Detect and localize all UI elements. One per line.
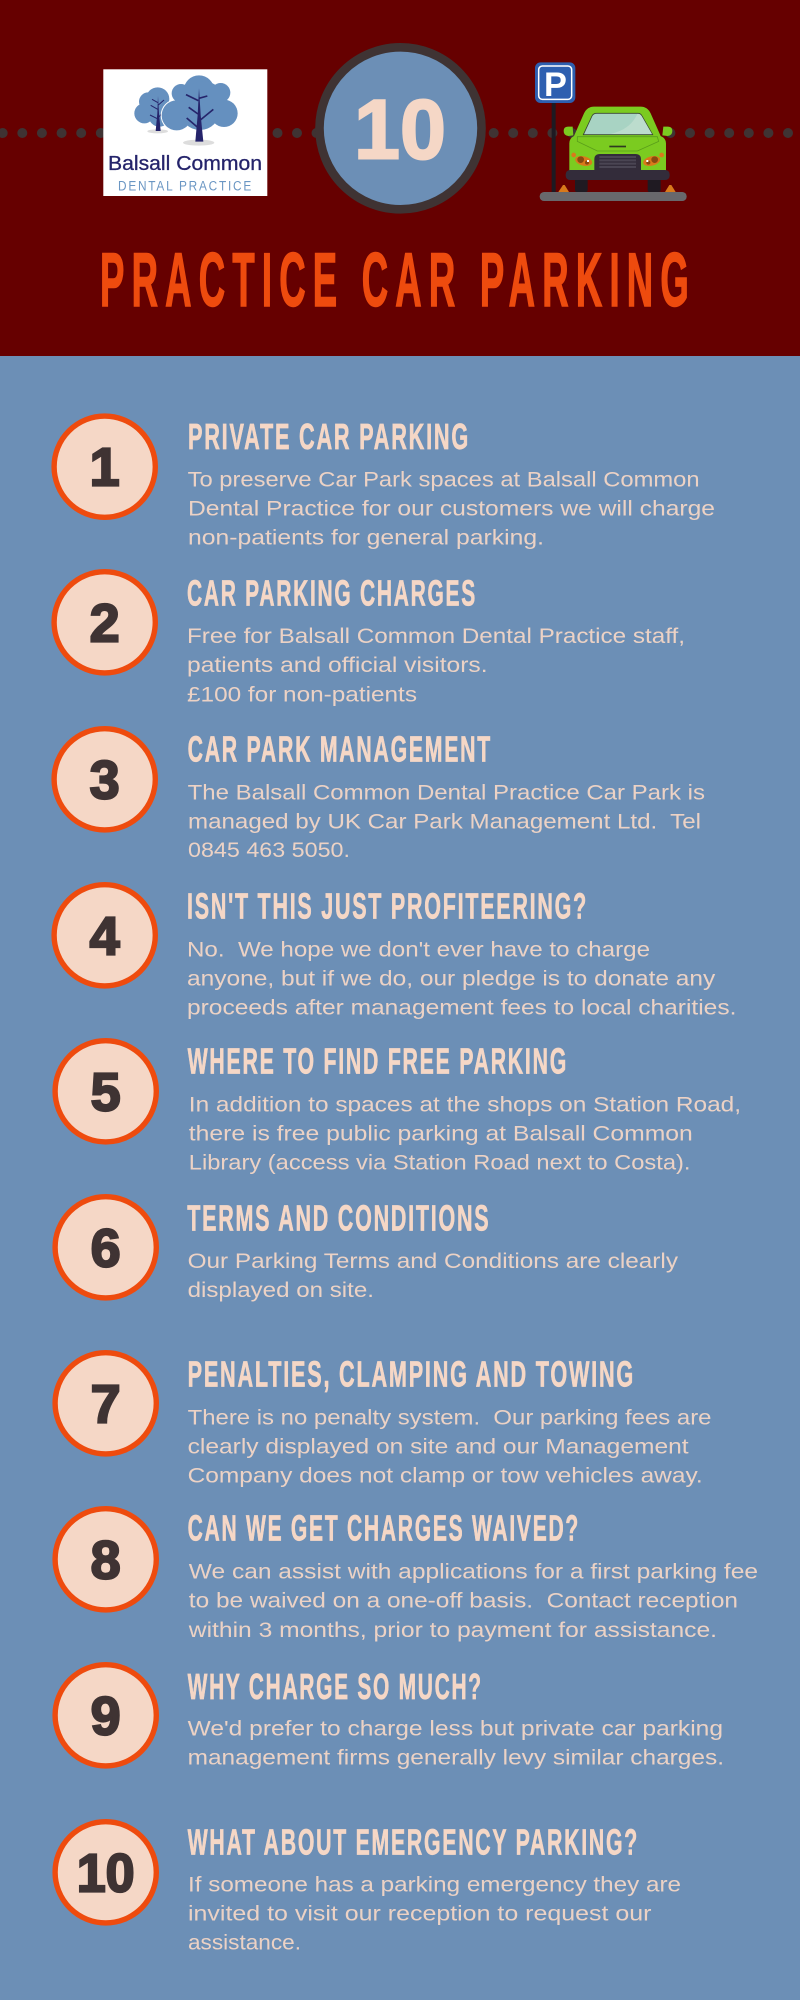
number 2: 2 (90, 594, 120, 654)
icon: parking sign: P (544, 66, 567, 104)
number 4: 4 (90, 906, 120, 966)
text 9: We'd prefer to charge less but private car parking (188, 1717, 723, 1740)
text 8: to be waived on a one-off basis. Contact reception (189, 1590, 738, 1613)
icon: car (564, 107, 672, 192)
item 8 (55, 1508, 758, 1642)
heading 3: CAR PARK MANAGEMENT (188, 729, 492, 770)
item 9 (55, 1665, 724, 1769)
number 7 (55, 1353, 156, 1454)
number 4 (54, 885, 155, 986)
text 10 (188, 1873, 681, 1954)
number 8 (55, 1509, 156, 1610)
text 4: anyone, but if we do, our pledge is to donate any (187, 967, 716, 990)
text 6: Our Parking Terms and Conditions are clearly (188, 1250, 679, 1273)
number 9: 9 (91, 1686, 121, 1746)
text 2: Free for Balsall Common Dental Practice staff, (187, 625, 685, 648)
text 10: If someone has a parking emergency they are (188, 1873, 681, 1896)
text 3: The Balsall Common Dental Practice Car Park is (188, 781, 705, 804)
number 5 (55, 1041, 156, 1142)
number 10 (55, 1822, 156, 1923)
text 8 (188, 1561, 758, 1642)
text 1: To preserve Car Park spaces at Balsall Common (188, 469, 700, 492)
text 7: Company does not clamp or tow vehicles away. (188, 1464, 703, 1487)
text 1 (188, 469, 715, 550)
text 3: 0845 463 5050. (188, 839, 350, 862)
heading 9: WHY CHARGE SO MUCH? (188, 1666, 483, 1707)
number 6 (55, 1197, 156, 1298)
item 2 (54, 572, 685, 707)
text 7: clearly displayed on site and our Management (188, 1435, 689, 1458)
icon: trees (134, 74, 238, 146)
text 7 (188, 1406, 712, 1487)
item 7 (55, 1353, 712, 1487)
number 2 (54, 572, 155, 673)
item 1 (54, 416, 715, 550)
number 5: 5 (91, 1062, 121, 1122)
item 10 (55, 1822, 681, 1954)
text 2: patients and official visitors. (187, 654, 488, 677)
badge: 10: 10 (354, 82, 446, 176)
text 1: non-patients for general parking. (188, 527, 544, 550)
number 1 (54, 416, 155, 517)
icon: ground and wheel stops (540, 185, 687, 201)
text 10: invited to visit our reception to request our (188, 1902, 651, 1925)
item 3 (54, 729, 705, 862)
number 9 (55, 1665, 156, 1766)
number 6: 6 (91, 1218, 121, 1278)
dotted line (0, 128, 793, 138)
text 5: In addition to spaces at the shops on Station Road, (189, 1093, 741, 1116)
text 5: Library (access via Station Road next to Costa). (189, 1151, 691, 1174)
number 3 (54, 729, 155, 830)
number 1: 1 (90, 438, 120, 498)
item 5 (55, 1041, 741, 1174)
text 3 (188, 781, 705, 862)
text 3: managed by UK Car Park Management Ltd. Tel (188, 810, 701, 833)
text 9 (188, 1717, 724, 1769)
text 6: displayed on site. (188, 1279, 374, 1302)
text 5 (189, 1093, 741, 1174)
number 3: 3 (90, 750, 120, 810)
heading 1: PRIVATE CAR PARKING (188, 416, 470, 457)
text 7: There is no penalty system. Our parking fees are (188, 1406, 712, 1429)
number 10: 10 (77, 1844, 135, 1904)
icon: car with parking sign (535, 62, 687, 201)
number 7: 7 (91, 1374, 121, 1434)
text 4 (187, 938, 736, 1019)
number 8: 8 (91, 1530, 121, 1590)
text 10: assistance. (188, 1931, 301, 1954)
text 9: management firms generally levy similar charges. (188, 1746, 724, 1769)
text 2 (187, 625, 685, 707)
text 4: proceeds after management fees to local charities. (187, 996, 736, 1019)
text 6 (188, 1250, 679, 1302)
logo: Balsall Common Dental Practice (103, 69, 267, 196)
text 8: within 3 months, prior to payment for assistance. (188, 1619, 717, 1642)
icon: parking sign (535, 62, 575, 192)
text 1: Dental Practice for our customers we will charge (188, 498, 715, 521)
text 5: there is free public parking at Balsall Common (189, 1122, 693, 1145)
heading 6: TERMS AND CONDITIONS (187, 1198, 490, 1239)
text 8: We can assist with applications for a first parking fee (189, 1561, 758, 1584)
item 4 (54, 885, 736, 1019)
text 4: No. We hope we don't ever have to charge (187, 938, 650, 961)
logo text: Balsall Common: Balsall Common (108, 152, 262, 175)
text 2: £100 for non-patients (187, 684, 417, 707)
badge: 10 (320, 47, 482, 209)
panel: header (0, 0, 800, 356)
item 6 (55, 1197, 679, 1302)
logo text: Dental Practice: DENTAL PRACTICE (118, 179, 253, 194)
heading 2: CAR PARKING CHARGES (187, 573, 477, 614)
